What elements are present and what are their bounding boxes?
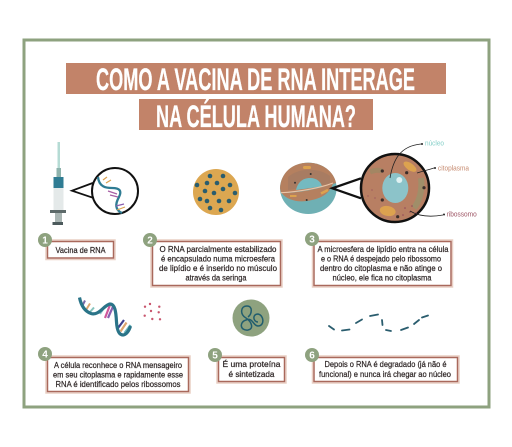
step 3: núcleo, ele fica no citoplasma — [332, 272, 432, 282]
step 5: É uma proteína — [222, 359, 281, 369]
step 2: através da seringa — [186, 272, 247, 282]
step 5: é sintetizada — [228, 369, 275, 379]
step 1 — [38, 233, 115, 260]
title — [66, 61, 446, 134]
icon: ribosome dots — [144, 303, 161, 320]
step 3: A microesfera de lipídio entra na célula — [318, 244, 449, 254]
step 4: em seu citoplasma e rapidamente esse — [53, 370, 183, 380]
icon: RNA strand — [80, 298, 130, 335]
step 5 — [208, 348, 286, 383]
icon: lipid microsphere — [193, 169, 239, 215]
step 1: Vacina de RNA — [56, 245, 106, 255]
step 2 — [143, 233, 282, 287]
label: citoplasma: citoplasma — [438, 166, 469, 172]
step 4: 4 — [42, 350, 48, 360]
step 4 — [38, 347, 190, 393]
icon: human cell — [280, 163, 337, 214]
step 3: 3 — [309, 234, 315, 246]
step 2: 2 — [147, 236, 153, 246]
icon: degraded RNA fragments — [329, 314, 428, 331]
label: ribossomo: ribossomo — [447, 212, 477, 218]
step 3: e o RNA é despejado pelo ribossomo — [321, 254, 441, 264]
step 5: 5 — [212, 350, 218, 362]
step 6: 6 — [309, 350, 315, 362]
step 6: funcional) e nunca irá chegar ao núcleo — [319, 369, 451, 379]
step 3 — [305, 232, 452, 287]
step 1: 1 — [42, 236, 48, 246]
icon: zoomed cell — [361, 154, 429, 222]
label: núcleo — [390, 140, 444, 178]
step 3: dentro do citoplasma e não atinge o — [320, 263, 442, 273]
step 2: de lipídio e é inserido no músculo — [159, 263, 277, 273]
step 2: O RNA parcialmente estabilizado — [160, 244, 277, 254]
step 6 — [305, 348, 459, 383]
label: núcleo: núcleo — [425, 140, 444, 148]
label: citoplasma — [417, 166, 469, 173]
icon: lens with RNA — [72, 168, 138, 214]
step 4: A célula reconhece o RNA mensageiro — [54, 360, 182, 370]
step 4: RNA é identificado pelos ribossomos — [56, 379, 180, 389]
label: ribossomo — [410, 211, 477, 218]
step 2: é encapsulado numa microesfera — [161, 254, 275, 264]
pointer to zoomed cell — [332, 178, 361, 198]
icon: syringe — [50, 142, 66, 225]
step 6: Depois o RNA é degradado (já não é — [324, 359, 447, 369]
title: NA CÉLULA HUMANA? — [156, 98, 356, 134]
icon: synthesized protein — [232, 300, 270, 336]
panel: green frame — [24, 40, 489, 407]
